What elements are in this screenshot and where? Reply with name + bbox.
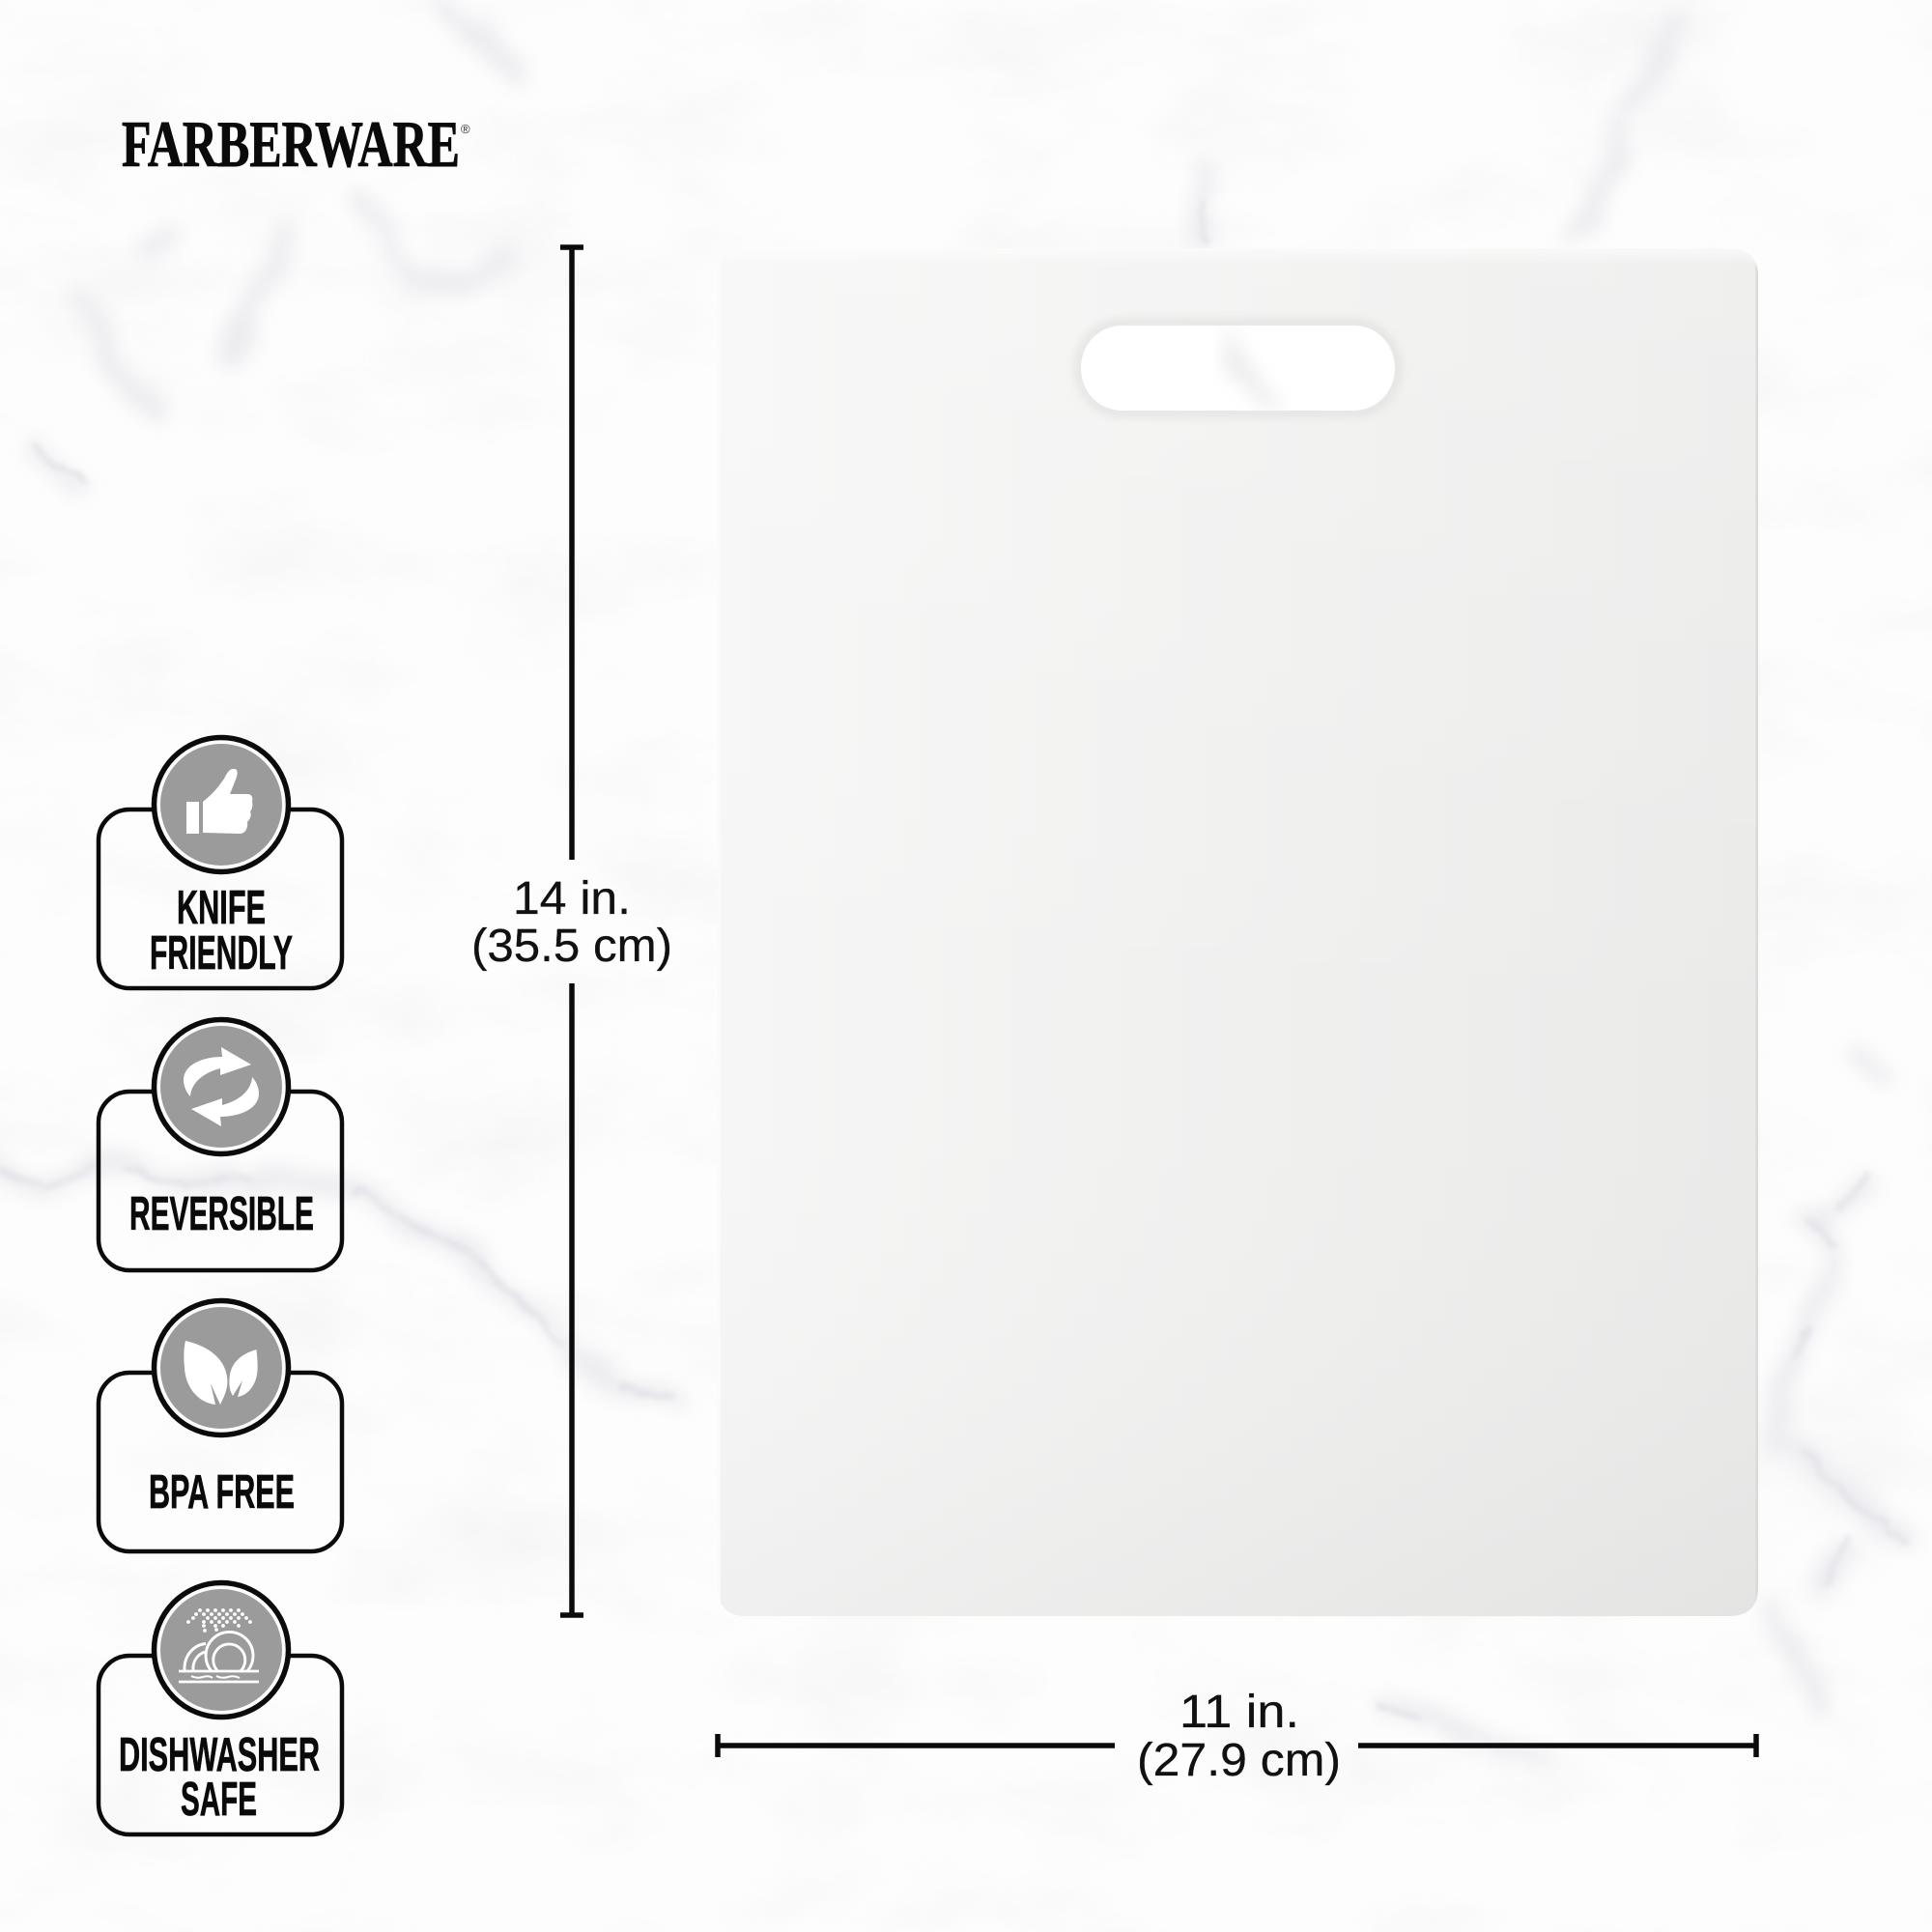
- height dimension: 14 in.: 14 in.: [513, 873, 631, 924]
- logo: Farberware: FARBERWARE: [122, 107, 460, 181]
- width dimension: 11 in.: (27.9 cm): [1137, 1735, 1341, 1786]
- label: BPA free: BPA FREE: [149, 1466, 295, 1519]
- badge: BPA free: [99, 1300, 342, 1551]
- icon: leaves: [184, 1341, 258, 1405]
- icon: reversible arrows: [184, 1047, 259, 1126]
- icon: dishes under spray: [179, 1608, 259, 1682]
- badge: knife friendly: [99, 738, 342, 988]
- label: dishwasher safe: DISHWASHER: [119, 1729, 320, 1781]
- width dimension: 11 in.: 11 in.: [1179, 1687, 1299, 1738]
- label: knife friendly: [150, 882, 293, 980]
- height dimension: 14 in.: [471, 247, 672, 1615]
- label: reversible: REVERSIBLE: [129, 1188, 314, 1240]
- logo: Farberware: ®: [461, 122, 470, 136]
- height dimension: 14 in.: (35.5 cm): [471, 921, 672, 972]
- label: dishwasher safe: [119, 1729, 320, 1826]
- badge: reversible: [99, 1020, 342, 1270]
- width dimension: 11 in.: [718, 1687, 1756, 1786]
- view through the handle hole: [1081, 326, 1395, 411]
- icon: thumbs up: [186, 769, 252, 834]
- cutting board with handle hole: [718, 248, 1758, 1616]
- label: knife friendly: FRIENDLY: [150, 927, 293, 980]
- label: dishwasher safe: SAFE: [181, 1774, 257, 1826]
- badge: dishwasher safe: [99, 1582, 342, 1834]
- label: knife friendly: KNIFE: [177, 882, 266, 934]
